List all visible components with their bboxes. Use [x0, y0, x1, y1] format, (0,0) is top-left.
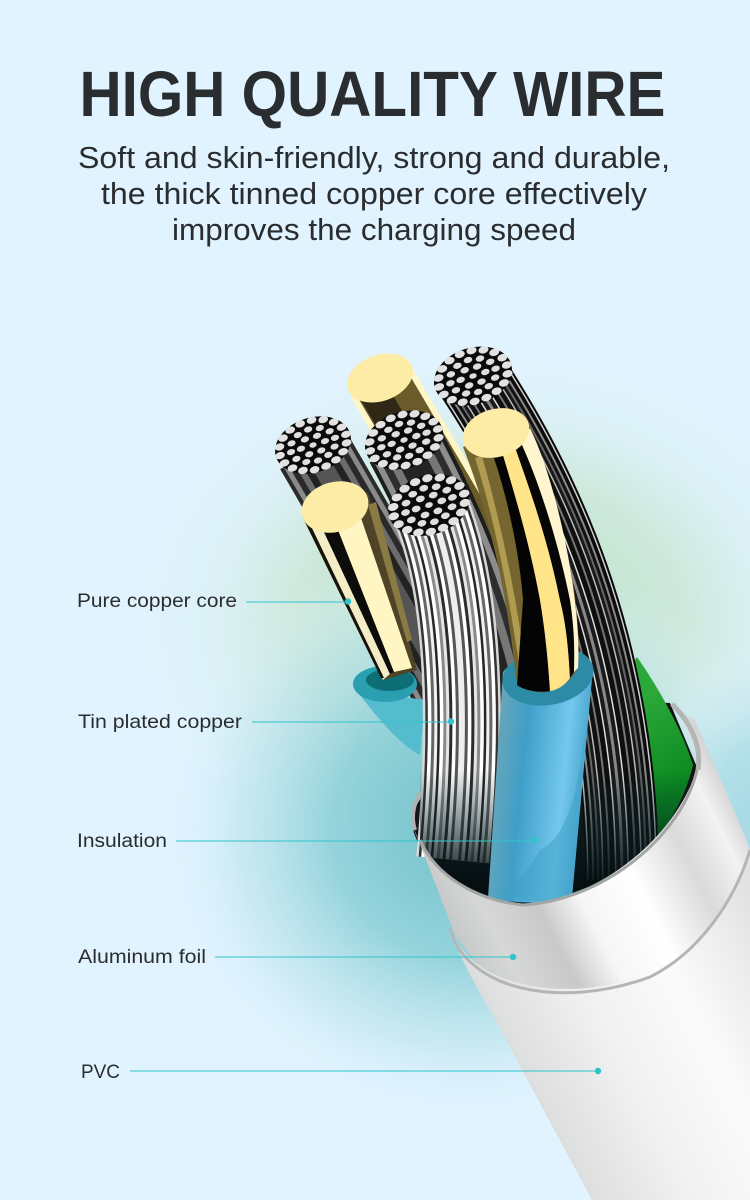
cap: back left strand — [268, 407, 358, 483]
back left tin strand — [313, 450, 450, 690]
cap: middle strand — [357, 401, 451, 479]
callout: Insulation — [77, 831, 538, 852]
teal insulated wire — [353, 666, 425, 755]
left copper core — [295, 474, 417, 680]
callout: PVC: PVC — [81, 1062, 120, 1083]
callout: PVC — [81, 1062, 601, 1083]
callout: Tin plated copper: Tin plated copper — [78, 712, 243, 733]
cable illustration — [268, 337, 750, 1200]
middle tin strand — [404, 444, 510, 740]
subtitle — [78, 140, 670, 247]
back copper strand — [340, 345, 480, 556]
subtitle: the thick tinned copper core effectively — [101, 176, 648, 211]
callout: Aluminum foil — [78, 947, 516, 968]
callout: Pure copper core: Pure copper core — [77, 591, 237, 612]
blue insulated wire — [488, 639, 598, 903]
callout: Tin plated copper — [78, 712, 454, 733]
callout: Aluminum foil: Aluminum foil — [78, 947, 206, 968]
front tin strand — [430, 508, 462, 860]
PVC jacket — [450, 850, 750, 1200]
right copper core — [457, 401, 579, 692]
subtitle: Soft and skin-friendly, strong and durable, — [78, 140, 670, 175]
green insulated wire — [610, 657, 693, 855]
callout: Insulation: Insulation — [77, 831, 167, 852]
cable interior — [412, 703, 699, 905]
callout: Pure copper core — [77, 591, 351, 612]
shadow at bottom of strands — [420, 770, 699, 905]
cap: back right strand — [426, 337, 520, 415]
subtitle: improves the charging speed — [172, 212, 576, 247]
cap: front strand — [380, 464, 478, 546]
back right tin strand — [473, 378, 622, 880]
title: HIGH QUALITY WIRE — [80, 58, 666, 130]
aluminum foil band — [413, 704, 750, 1020]
